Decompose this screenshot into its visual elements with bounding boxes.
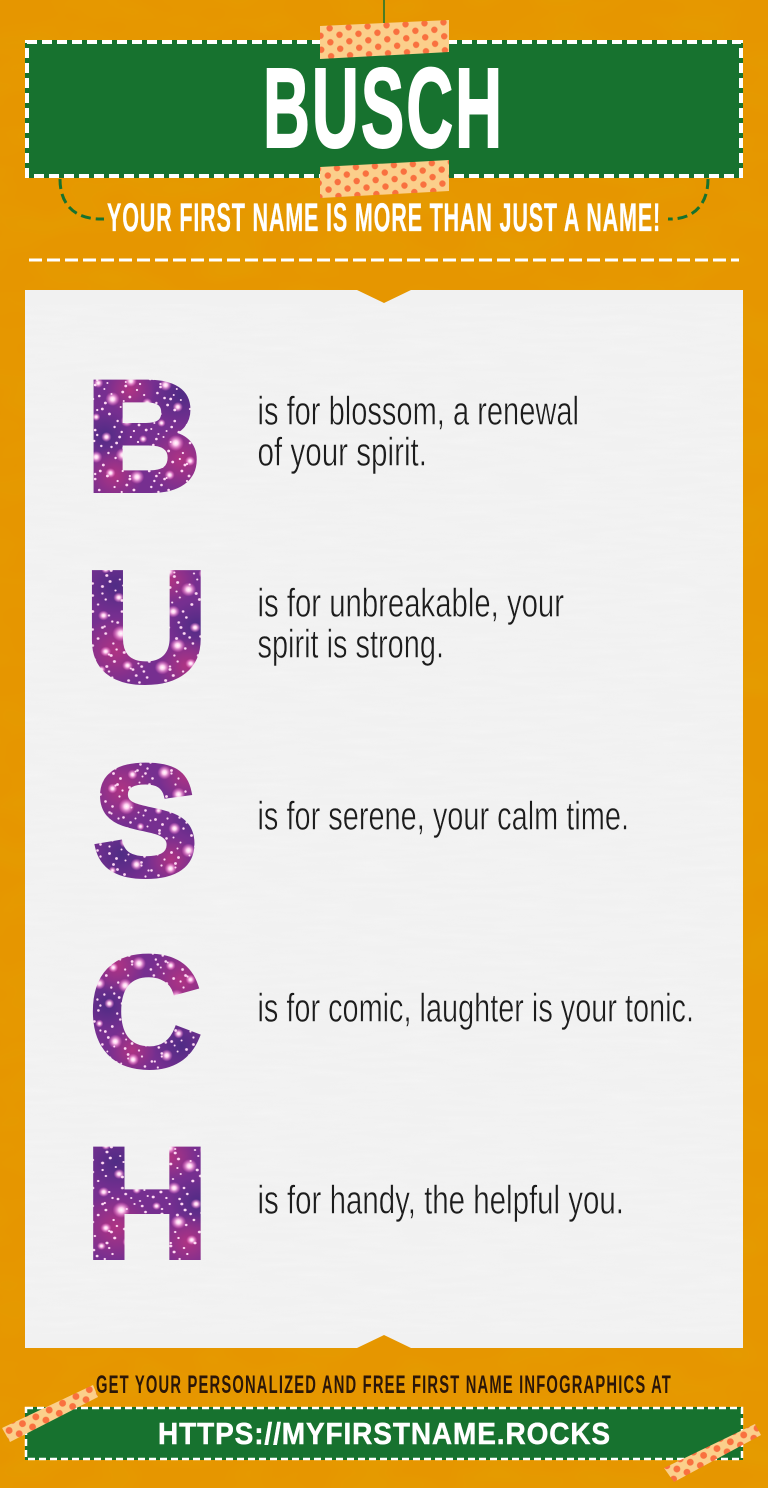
text B: of your spirit. [258, 430, 427, 474]
top washi tape [320, 20, 449, 59]
main paper panel [25, 290, 743, 1348]
row U [85, 539, 564, 714]
bottom washi tape [320, 160, 449, 198]
text U: spirit is strong. [258, 622, 444, 666]
text U: is for unbreakable, your [258, 582, 564, 626]
footer banner [25, 1407, 743, 1460]
text U [258, 582, 564, 666]
text S: is for serene, your calm time. [258, 794, 629, 838]
row H [85, 1116, 624, 1290]
text B: is for blossom, a renewal [258, 390, 579, 434]
dashed divider [29, 258, 739, 262]
row C [90, 924, 694, 1099]
row B [86, 349, 579, 524]
letter U: U [85, 539, 208, 714]
letter B: B [86, 349, 201, 524]
text B [258, 390, 579, 474]
letter S: S [94, 734, 198, 908]
row S [94, 734, 629, 908]
text H: is for handy, the helpful you. [258, 1178, 624, 1222]
footer left tape [2, 1385, 98, 1442]
title: BUSCH: BUSCH [263, 45, 504, 172]
title banner [25, 40, 743, 178]
footer right tape [664, 1424, 761, 1482]
footer url: HTTPS://MYFIRSTNAME.ROCKS [158, 1416, 611, 1451]
letter C: C [90, 924, 201, 1099]
letter H: H [85, 1116, 209, 1290]
left dashed connector [60, 179, 104, 219]
hanging string [383, 0, 385, 24]
right dashed connector [668, 179, 708, 219]
